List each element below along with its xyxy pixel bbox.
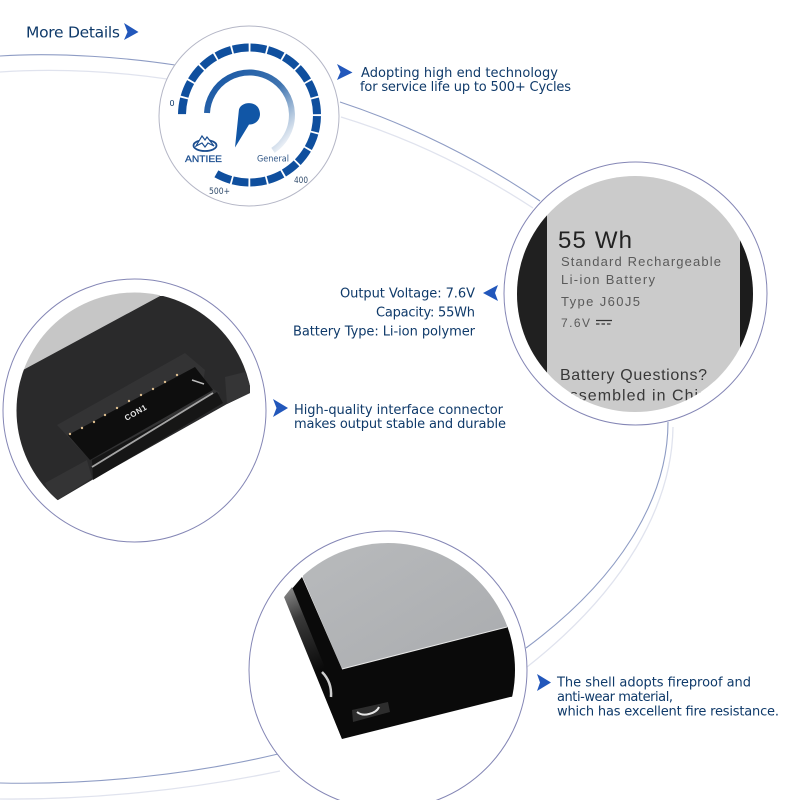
shell photo content (284, 543, 515, 739)
text: battery specifications (293, 286, 476, 340)
gauge inner arc (207, 73, 292, 150)
label photo content: 7.6V (561, 316, 590, 330)
label photo content: Li-ion Battery (561, 272, 656, 287)
icon: ANTIEE logo: ANTIEE (185, 154, 222, 164)
panel: interface connector photo (3, 279, 270, 542)
gauge label: 0: 0 (170, 99, 175, 108)
text: shell callout (556, 676, 779, 720)
label photo content: Assembled in China (558, 388, 718, 404)
text: connector callout (294, 403, 506, 432)
text: battery specifications: Output Voltage: 7.6V (340, 286, 475, 302)
text: shell callout: anti-wear material, (557, 690, 673, 705)
label photo content: Battery Questions? (560, 367, 707, 384)
text: cycles callout (360, 66, 571, 95)
text: battery specifications: Battery Type: Li-ion polymer (293, 324, 476, 340)
label photo content: Type J60J5 (561, 294, 640, 309)
text: connector callout: makes output stable and durable (294, 417, 506, 432)
gauge label: General: General (257, 154, 289, 164)
panel: cycle gauge (159, 26, 339, 206)
arrow: cycles callout (337, 64, 352, 80)
gauge label: 500+: 500+ (209, 187, 230, 197)
connector photo content: CON1 (123, 403, 149, 423)
text: cycles callout: for service life up to 500+ Cycles (360, 80, 571, 95)
arrow: specifications callout (483, 285, 498, 301)
label photo content (517, 176, 753, 412)
icon: ANTIEE logo (185, 136, 222, 164)
arrow: More Details (124, 23, 138, 40)
text: cycles callout: Adopting high end technology (361, 66, 558, 81)
arrow: connector callout (273, 399, 288, 417)
text: connector callout: High-quality interface connector (294, 403, 504, 418)
label photo content: 55 Wh (558, 227, 632, 254)
heading: More Details: More Details (26, 24, 120, 42)
gauge needle (235, 103, 260, 148)
text: battery specifications: Capacity: 55Wh (376, 306, 475, 320)
arrow: shell callout (537, 674, 551, 691)
panel: fireproof shell photo (249, 530, 530, 800)
label photo content: Standard Rechargeable (561, 254, 721, 269)
connector photo content (16, 292, 250, 500)
text: shell callout: which has excellent fire resistance. (557, 704, 779, 720)
text: shell callout: The shell adopts fireproof and (556, 676, 751, 690)
gauge segmented ring (182, 48, 317, 183)
gauge label: 400: 400 (294, 176, 308, 186)
panel: battery label photo (504, 162, 767, 425)
